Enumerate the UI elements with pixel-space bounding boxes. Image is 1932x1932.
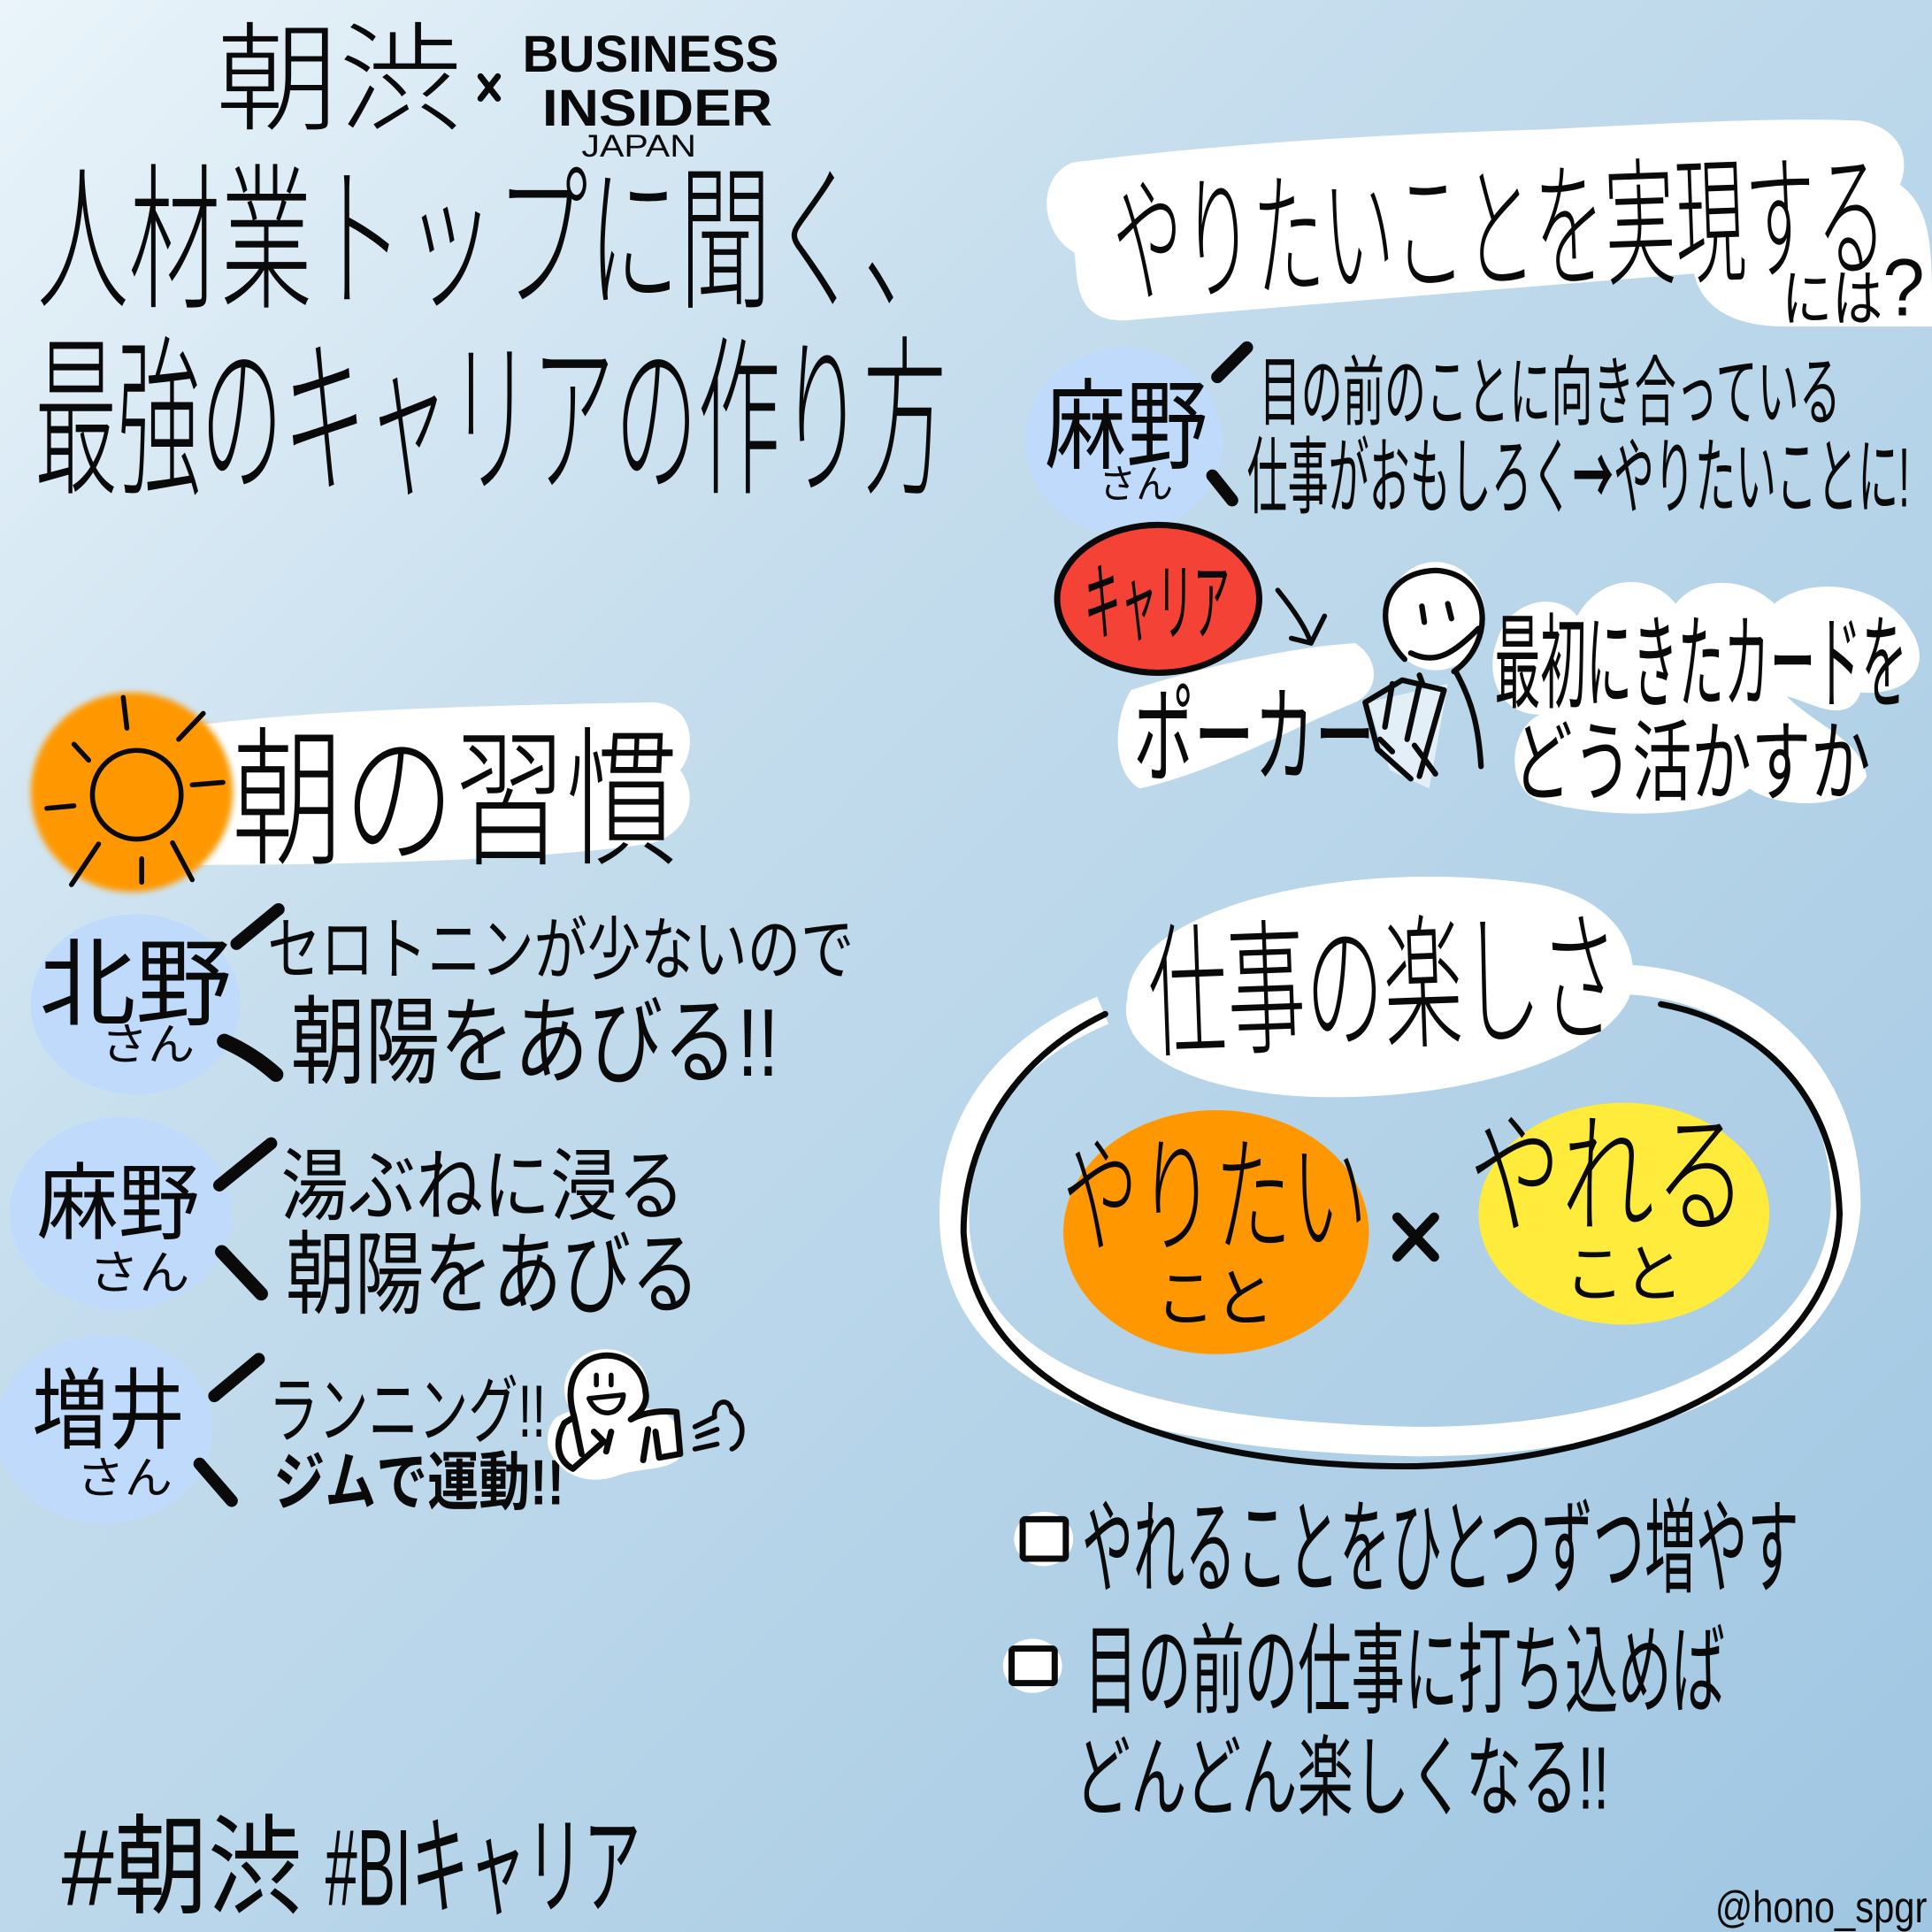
person: 増井さん [0, 1336, 742, 1523]
person: 北野さん: セロトニンが少ないので [267, 910, 854, 988]
checklist item 2: どんどん楽しくなる!! [1075, 1729, 1609, 1828]
callout: career [1057, 525, 1260, 672]
header: logos [216, 14, 778, 164]
main title: 人材業トップに聞く、 [37, 153, 954, 329]
cloud: first card dealt [1492, 582, 1920, 814]
text: 最強のキャリアの作り方 [34, 325, 947, 518]
logo: Business Insider Japan [523, 26, 778, 164]
person: 麻野さん right: 麻野 [1045, 372, 1208, 482]
person: 北野さん: さん [101, 1020, 195, 1070]
multiplication sign [480, 76, 498, 98]
hashtags: #朝渋 [62, 1806, 302, 1928]
logo: Business Insider Japan: INSIDER [542, 80, 772, 137]
callout: career: キャリア [1085, 556, 1230, 652]
heading: 仕事の楽しさ [1126, 877, 1633, 1097]
logo: 朝渋: 朝渋 [216, 14, 462, 146]
poker label [1118, 643, 1375, 797]
logo: Business Insider Japan: BUSINESS [523, 26, 778, 83]
heading: 朝の習慣 [31, 693, 690, 892]
icon: sun [47, 697, 223, 885]
person: 増井さん: ランニング!! [269, 1369, 546, 1453]
person: 増井さん: 増井 [32, 1362, 185, 1461]
heading blob [1046, 119, 1932, 326]
ring: outline [963, 1004, 1840, 1467]
person: 北野さん: 北野 [40, 932, 232, 1039]
person: 増井さん: さん [76, 1453, 172, 1503]
checklist item 2 [1003, 1616, 1725, 1828]
hashtags [62, 1806, 640, 1928]
person: 麻野さん right [1025, 348, 1910, 534]
orange circle: want to do [1062, 1110, 1368, 1354]
person: 麻野さん right: さん [1099, 464, 1173, 507]
arrow: career to poker [1277, 590, 1324, 643]
sub heading [1782, 243, 1925, 334]
logo: Business Insider Japan: JAPAN [581, 129, 696, 164]
sub heading: ? [1882, 243, 1925, 334]
heading: 朝の習慣: 朝の習慣 [232, 717, 678, 886]
orange circle: want to do: やりたい [1062, 1126, 1368, 1269]
person: 麻野さん [10, 1117, 700, 1325]
multiplication sign [1398, 1217, 1434, 1257]
person: 麻野さん: さん [88, 1247, 189, 1300]
yellow circle: can do: やれる [1468, 1102, 1747, 1251]
icon: running person [548, 1349, 742, 1480]
person: 北野さん: 朝陽をあびる!! [291, 990, 778, 1097]
main title [34, 153, 954, 518]
hashtags: #BIキャリア [326, 1806, 640, 1928]
person: 麻野さん: 湯ぶねに浸る [281, 1142, 685, 1230]
person: 麻野さん: 麻野 [37, 1157, 200, 1251]
orange circle: want to do: こと [1155, 1263, 1274, 1335]
icon: puff of breath [695, 1402, 742, 1449]
yellow circle: can do: こと [1565, 1238, 1683, 1310]
panel: joy of work [954, 877, 1846, 1828]
poker label: ポーカー [1133, 679, 1375, 797]
person: 北野さん [31, 909, 854, 1097]
yellow circle: can do [1468, 1102, 1769, 1324]
panel: realising what you want to do [1025, 119, 1932, 814]
icon: person holding cards [1365, 562, 1484, 788]
panel: morning habits [0, 693, 854, 1523]
person: 麻野さん: 朝陽をあびる [286, 1223, 700, 1325]
ring: white brush [954, 979, 1846, 1442]
sub heading: には [1782, 264, 1882, 334]
person: 増井さん: ジムで運動!! [273, 1447, 564, 1519]
